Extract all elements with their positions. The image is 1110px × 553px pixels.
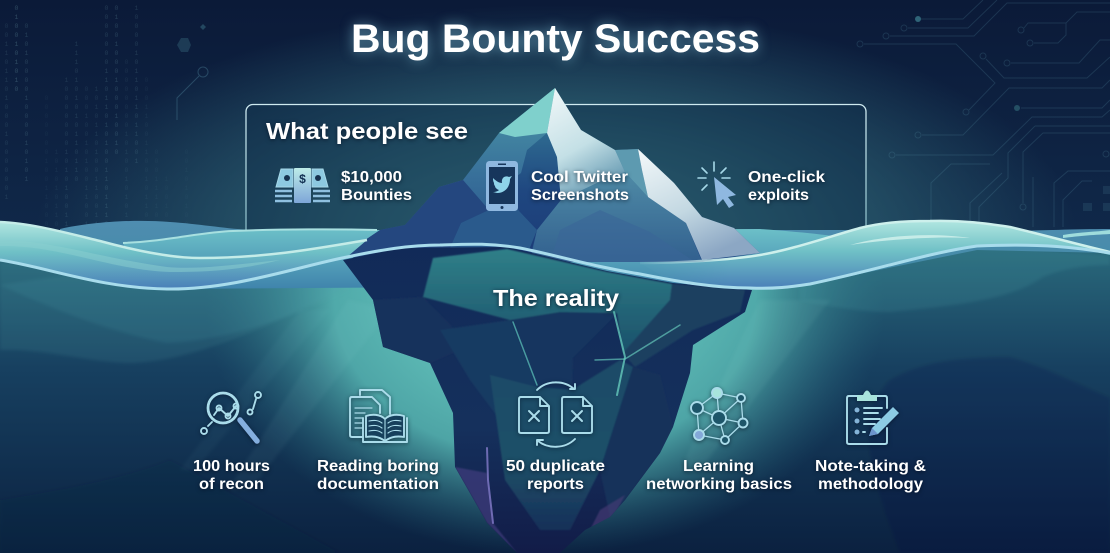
water: crest hills and bright lines (0, 221, 1110, 289)
label: reading boring documentation: documentation (317, 476, 439, 493)
iceberg: shoulder facet (615, 149, 648, 197)
water: underwater glow (150, 250, 950, 553)
water: horizon mid band (123, 229, 940, 289)
water: left crest hill (0, 222, 367, 289)
label: 100 hours of recon: of recon (199, 476, 264, 493)
icon: magnifier with graph (201, 392, 261, 441)
label: learning networking basics: networking basics (646, 476, 792, 493)
binary code background: 000100101001100100 (85, 86, 88, 246)
what people see panel (246, 104, 866, 244)
label: one-click exploits (748, 169, 825, 204)
binary code background: 100001011011011001 (135, 5, 138, 165)
title: Bug Bounty Success (351, 17, 760, 61)
water: light rays (180, 300, 830, 490)
iceberg: right dark facet (623, 284, 745, 367)
iceberg: lower teal facets (490, 360, 633, 530)
iceberg: peak-left teal facet (499, 88, 555, 137)
circuit traces: left (177, 24, 208, 120)
icon: phone with bird (486, 161, 518, 211)
binary code background: 0000000110110101001101110 (105, 5, 108, 228)
binary code background: 010100001000010101 (25, 23, 28, 183)
iceberg: centre right facet (530, 172, 702, 262)
label: note-taking and methodology: Note-taking & (815, 458, 926, 475)
iceberg: glowing crack lines (487, 312, 680, 523)
label: 100 hours of recon (193, 458, 270, 493)
water: underwater body (0, 245, 1110, 553)
heading: what people see: What people see (266, 118, 468, 144)
water: underwater swells (0, 246, 1110, 553)
label: 50 duplicate reports: reports (527, 476, 584, 493)
label: cool twitter screenshots: Cool Twitter (531, 169, 628, 186)
icon: money stacks (275, 168, 330, 203)
binary code background: 0001111000 (155, 149, 158, 237)
iceberg: upper teal facet (422, 248, 673, 352)
iceberg: left navy facet (346, 180, 530, 262)
iceberg: central dark facet (449, 133, 561, 262)
binary code background: 0100101010 (15, 5, 18, 93)
water: right crest hill (640, 221, 1110, 289)
water: front bright line (0, 244, 1110, 289)
iceberg: left side facet (373, 298, 430, 363)
heading: the reality: The reality (493, 285, 619, 311)
label: bounties: $10,000 (341, 169, 402, 186)
label: 100 hours of recon: 100 hours (193, 458, 270, 475)
binary code background: 00110110100010000001 (5, 23, 8, 201)
iceberg: right white facet (638, 149, 760, 260)
binary code background: 01001000100010010 (115, 5, 118, 156)
icon: duplicate reports (519, 382, 592, 447)
iceberg: inner facets (373, 249, 745, 553)
label: note-taking and methodology: methodology (818, 476, 923, 493)
binary code background: 100100 (165, 176, 168, 228)
label: learning networking basics: Learning (683, 458, 754, 475)
binary code background: 1010110100110011 (95, 86, 98, 228)
icon: clipboard and pencil (847, 390, 899, 444)
label: one-click exploits: One-click (748, 169, 825, 186)
label: cool twitter screenshots: Screenshots (531, 187, 629, 204)
label: note-taking and methodology (815, 458, 926, 493)
binary code background: 001010100 (185, 149, 188, 228)
icon: network nodes (691, 388, 748, 444)
binary code background: 10000000101010011100 (65, 77, 68, 255)
iceberg: lower left facet (449, 190, 537, 250)
iceberg above water (346, 88, 760, 262)
iceberg below water (340, 240, 760, 553)
label: 50 duplicate reports: 50 duplicate (506, 458, 605, 475)
iceberg: white ridge facet (547, 88, 625, 200)
label: reading boring documentation (317, 458, 439, 493)
label: learning networking basics (646, 458, 792, 493)
iceberg: centre facet (510, 312, 617, 390)
label: 50 duplicate reports (506, 458, 605, 493)
label: bounties (341, 169, 412, 204)
binary code background: 10101011010100 (55, 149, 58, 273)
icon: click cursor (698, 162, 736, 208)
icon: money stacks: $ (299, 172, 306, 186)
binary code background: 1110101010110110 (75, 41, 78, 183)
water: far horizon band (60, 221, 1110, 285)
iceberg: underwater silhouette (340, 240, 760, 553)
label: reading boring documentation: Reading boring (317, 458, 439, 475)
binary code background: 0000000100110000100100 (45, 95, 48, 291)
label: bounties: Bounties (341, 187, 412, 204)
binary code background: 00000000101001010101 (125, 59, 128, 237)
binary code background: 00011001100101100 (145, 77, 148, 228)
label: one-click exploits: exploits (748, 187, 809, 204)
label: cool twitter screenshots (531, 169, 629, 204)
binary code background (5, 5, 188, 291)
icon: documents and open book (350, 390, 407, 442)
iceberg: silhouette (346, 88, 760, 262)
circuit traces: right (857, 0, 1110, 227)
